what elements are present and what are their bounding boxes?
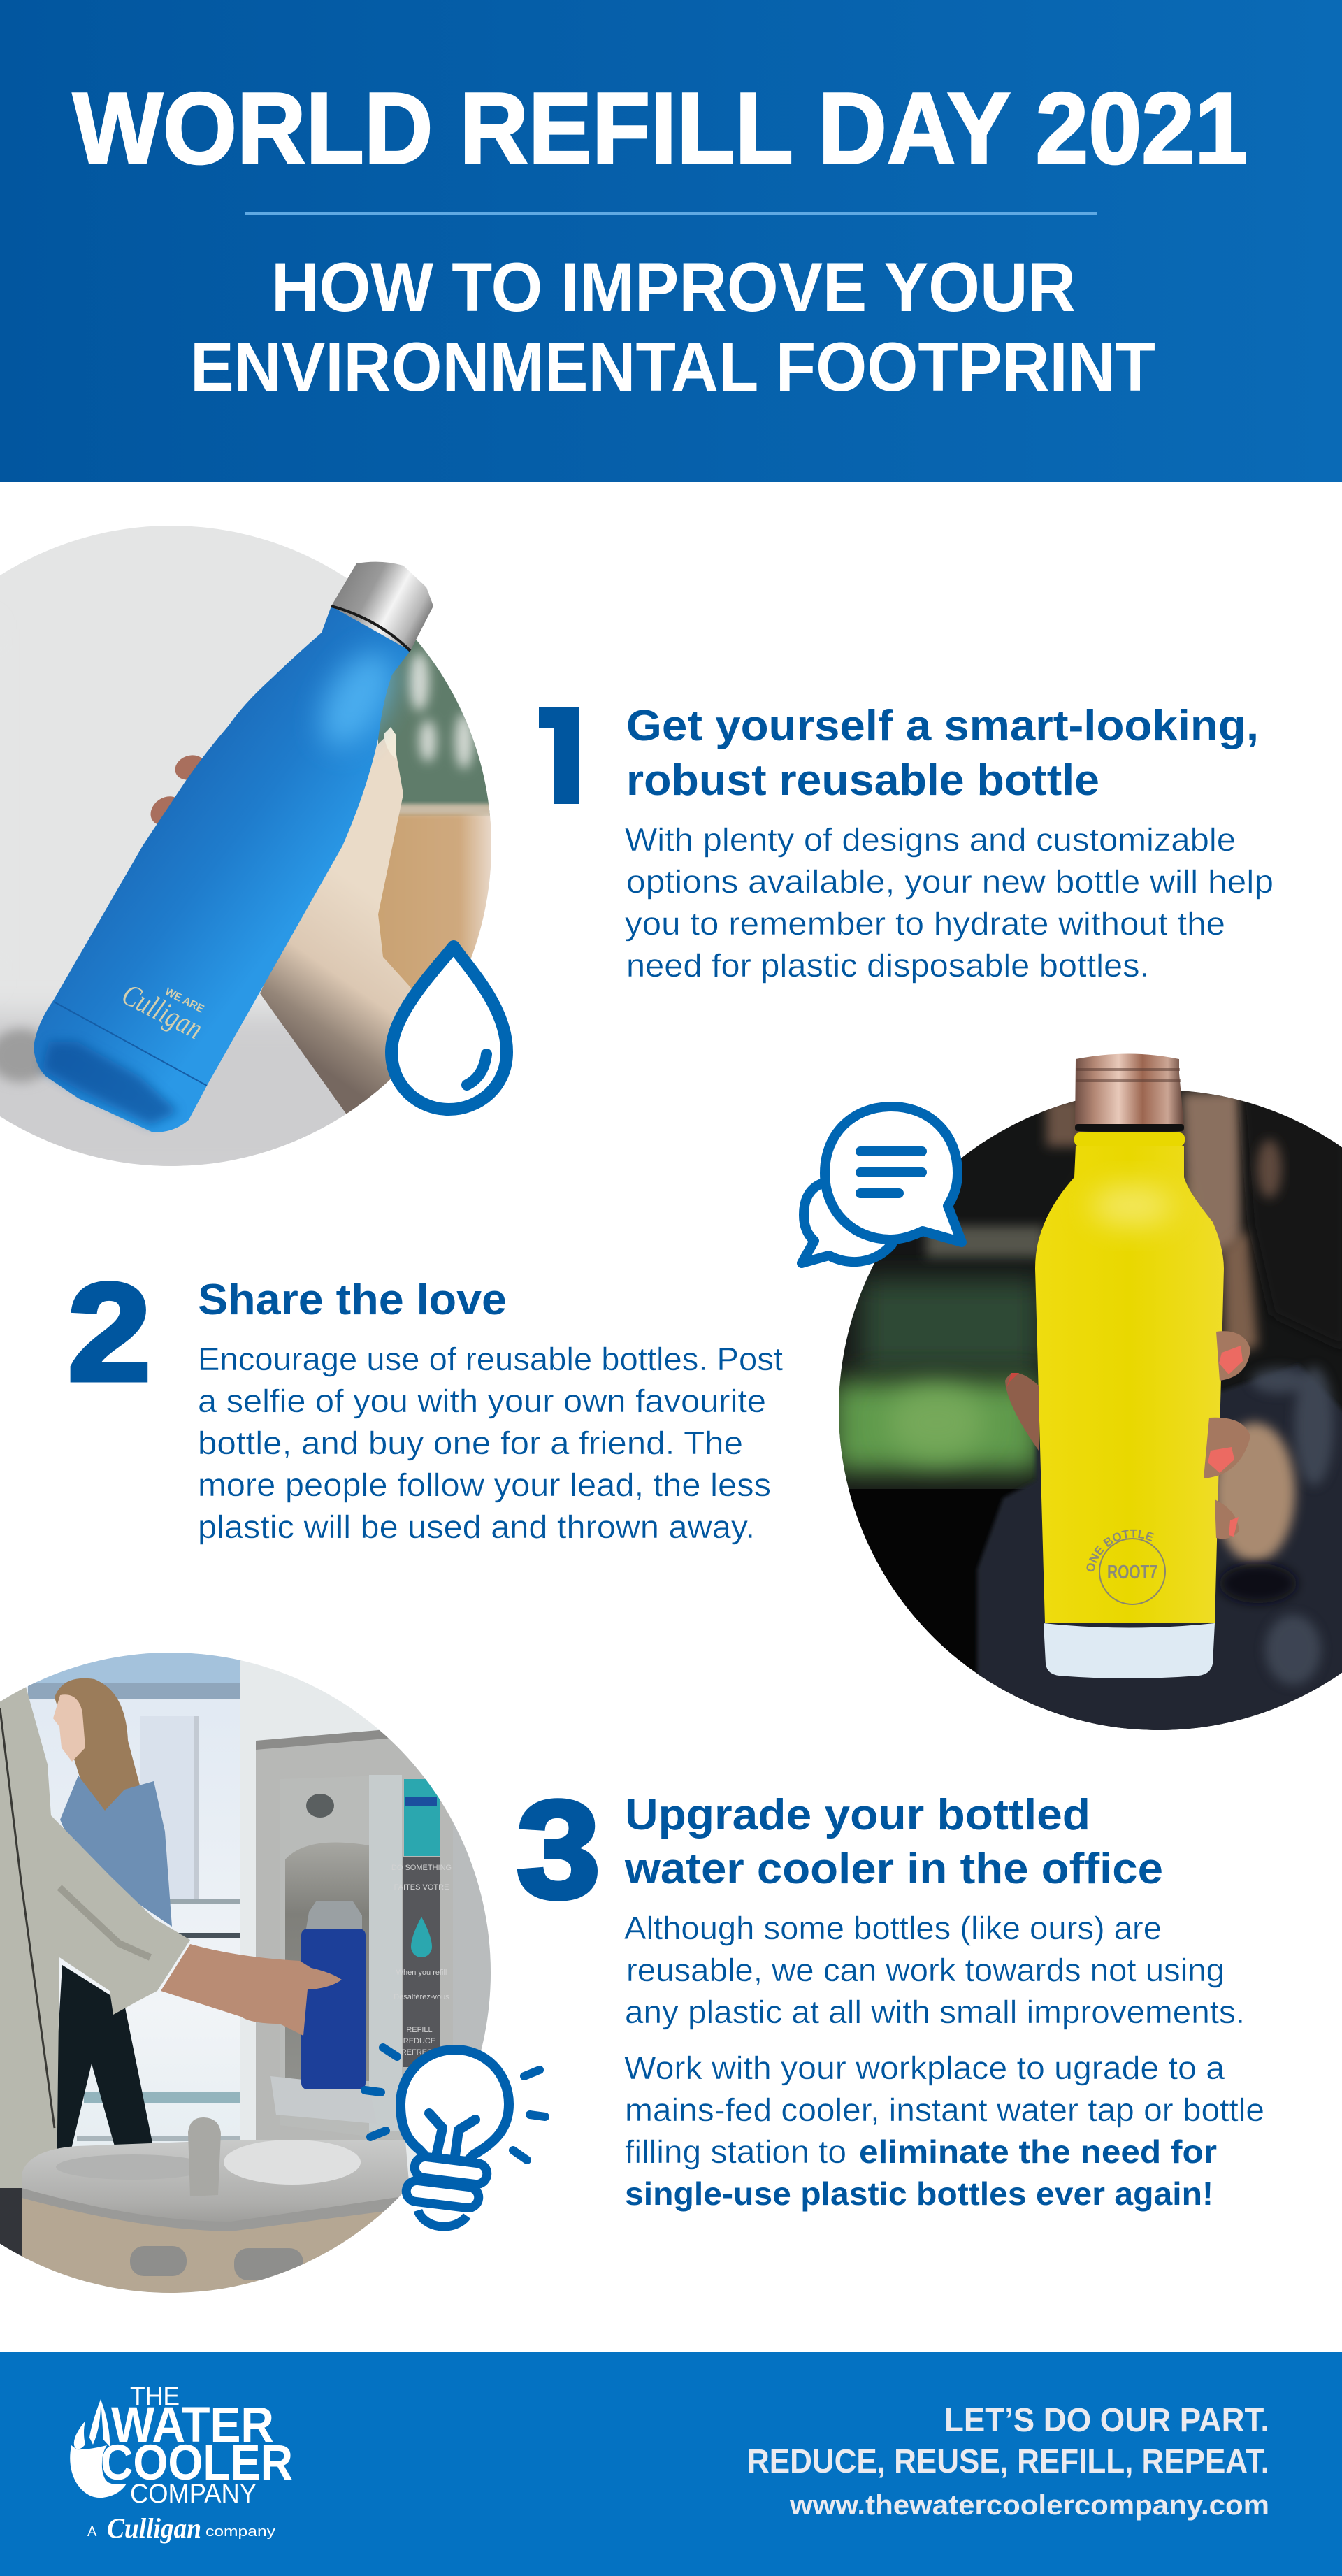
step 3 body paragraph 1: Although some bottles (like ours) are	[624, 1910, 1162, 1946]
photo: refill station: REDUCE	[403, 2037, 435, 2045]
footer	[0, 2352, 1342, 2576]
basin	[22, 2140, 408, 2226]
bottle logo: ONE BOTTLE	[1086, 1530, 1154, 1571]
logo: Culligan	[107, 2512, 201, 2544]
step 1 heading	[626, 702, 1259, 805]
step 3 body paragraph 2: eliminate the need for	[859, 2134, 1217, 2170]
call to action: LET’S DO OUR PART.	[944, 2402, 1269, 2439]
step 3 body paragraph 2: filling station to	[625, 2134, 846, 2170]
bottle logo: Culligan	[117, 977, 208, 1046]
call to action: REDUCE, REUSE, REFILL, REPEAT.	[747, 2443, 1269, 2480]
thumb nail	[384, 727, 396, 758]
arm and hand	[260, 738, 411, 1114]
bottle body	[34, 606, 410, 1132]
subtitle	[190, 248, 1155, 405]
person	[1046, 1098, 1081, 1146]
logo	[70, 2382, 293, 2544]
bottle base	[1044, 1623, 1215, 1678]
step 3 body paragraph 1: reusable, we can work towards not using	[626, 1952, 1225, 1988]
photo: yellow bottle held out	[839, 1054, 1342, 1730]
photo: refill station: Désaltérez-vous	[394, 1993, 449, 2001]
step 2 text	[68, 1255, 783, 1545]
photo: refill station: REFRESH	[401, 2048, 438, 2057]
logo: company	[205, 2524, 275, 2540]
arm	[161, 1944, 342, 2036]
step 1 body	[625, 821, 1274, 984]
clear bottle top	[306, 1901, 362, 1929]
yellow bottle body	[1035, 1146, 1224, 1623]
blue bottle	[301, 1929, 366, 2089]
logo: THE	[130, 2382, 180, 2412]
step 3 body paragraph 2: Work with your workplace to ugrade to a	[624, 2050, 1225, 2086]
teal and grey signage	[404, 1779, 440, 1856]
number 1	[539, 707, 579, 804]
tray	[270, 2076, 377, 2124]
photo: refill station: DO SOMETHING	[391, 1864, 452, 1872]
window backdrop	[26, 1686, 240, 2293]
step 2 body: a selfie of you with your own favourite	[198, 1383, 766, 1419]
step 1 text	[539, 707, 1272, 983]
step 3 body paragraph 2: single-use plastic bottles ever again!	[625, 2175, 1213, 2212]
step 3 body paragraph 2: mains-fed cooler, instant water tap or bottle	[625, 2092, 1264, 2128]
step 1 heading: robust reusable bottle	[626, 756, 1099, 805]
step 2 body: more people follow your lead, the less	[198, 1467, 771, 1503]
header banner	[0, 0, 1342, 482]
subtitle: ENVIRONMENTAL FOOTPRINT	[190, 328, 1155, 405]
photo: refill station: FAITES VOTRE	[394, 1883, 449, 1892]
call to action	[747, 2402, 1269, 2521]
fingers	[145, 751, 208, 831]
copper cap	[1075, 1054, 1184, 1131]
bottle cap	[331, 562, 433, 651]
spout	[188, 2117, 221, 2196]
icon: water drop	[391, 947, 507, 1109]
step 3 body paragraph 2	[624, 2050, 1264, 2212]
step 2 body: bottle, and buy one for a friend. The	[198, 1425, 743, 1461]
step 3 heading: water cooler in the office	[624, 1845, 1163, 1893]
logo: WATER	[111, 2398, 274, 2453]
photo: refill station: REFILL	[406, 2026, 433, 2034]
basin buttons	[130, 2246, 187, 2276]
step 1 heading: Get yourself a smart-looking,	[626, 702, 1259, 750]
bottle logo: ROOT7	[1107, 1561, 1157, 1583]
number 1: 1	[526, 678, 591, 834]
step 2 heading: Share the love	[198, 1276, 507, 1324]
step 3 heading: Upgrade your bottled	[625, 1791, 1090, 1839]
bottle logo: WE ARE	[163, 986, 206, 1016]
logo: COOLER	[101, 2435, 293, 2491]
step 1 body: you to remember to hydrate without the	[625, 905, 1225, 942]
photo: blue bottle in hand	[0, 524, 497, 1181]
logo: A	[87, 2524, 97, 2540]
step 3 body paragraph 1: any plastic at all with small improvements.	[625, 1994, 1245, 2030]
call to action: www.thewatercoolercompany.com	[789, 2490, 1269, 2521]
subtitle: HOW TO IMPROVE YOUR	[271, 248, 1076, 326]
icon: light bulb	[365, 2048, 545, 2226]
wall	[240, 1660, 417, 2178]
number 3: 3	[517, 1772, 600, 1927]
fingers	[1005, 1331, 1250, 1539]
photo: refill station	[0, 1650, 495, 2307]
bottle logo	[117, 970, 212, 1046]
step 1 body: With plenty of designs and customizable	[625, 821, 1236, 858]
bottle logo	[1086, 1530, 1166, 1605]
logo: COMPANY	[130, 2479, 257, 2509]
man shirt	[0, 1687, 190, 2188]
step 3 text	[517, 1772, 1264, 2212]
step 2 body	[198, 1341, 783, 1545]
step 1 body: need for plastic disposable bottles.	[626, 947, 1149, 984]
fountain plate	[256, 1730, 453, 2140]
step 2 body: plastic will be used and thrown away.	[198, 1509, 755, 1545]
step 3 body paragraph 1	[624, 1910, 1245, 2030]
number 2: 2	[68, 1255, 151, 1409]
woman	[57, 1965, 152, 2149]
icon: chat bubbles	[802, 1107, 962, 1263]
photo: refill station: When you refill	[396, 1969, 447, 1977]
title: WORLD REFILL DAY 2021	[73, 71, 1248, 185]
step 3 heading	[624, 1791, 1163, 1893]
step 1 body: options available, your new bottle will help	[626, 863, 1274, 900]
step 2 body: Encourage use of reusable bottles. Post	[198, 1341, 783, 1377]
